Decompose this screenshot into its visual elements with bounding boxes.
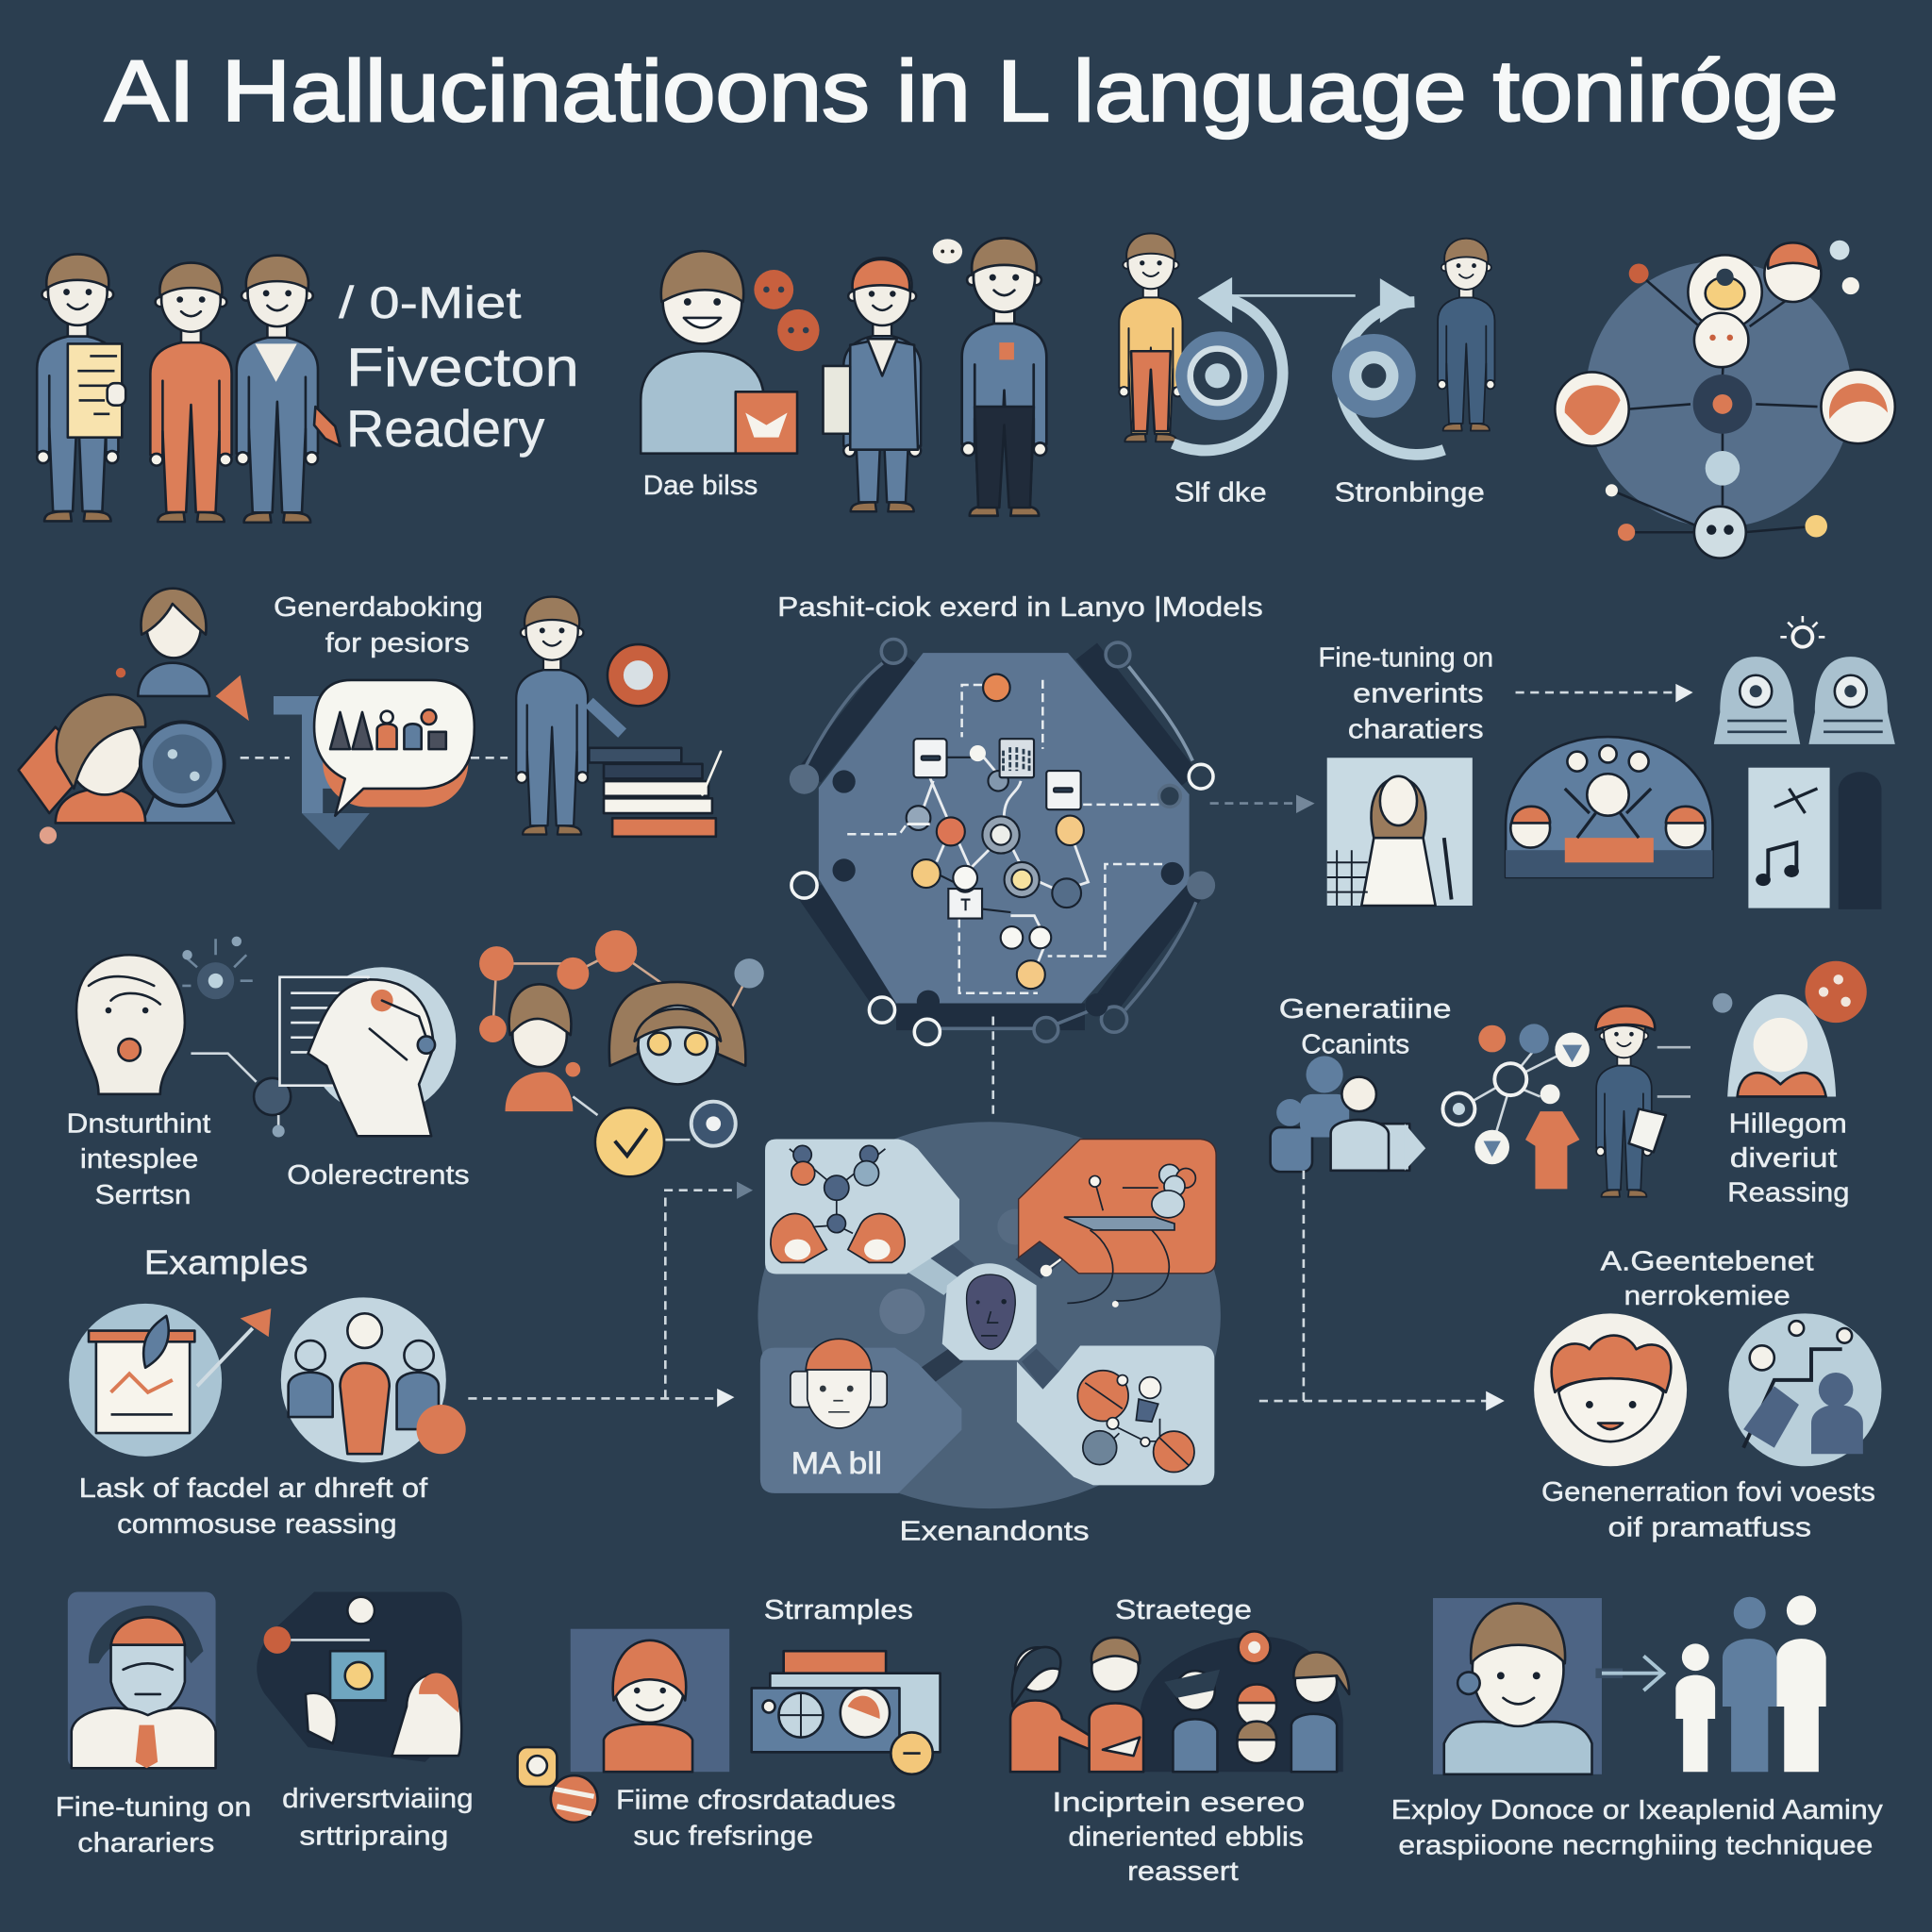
speech bubble bbox=[274, 680, 475, 850]
panel: hub with four cards bbox=[758, 1122, 1221, 1508]
panel: network circle bbox=[1555, 241, 1895, 558]
portrait card: man bbox=[1433, 1598, 1602, 1774]
graph links bbox=[920, 758, 1089, 963]
labels: diveriut bbox=[1730, 1143, 1837, 1174]
heading: charatiers bbox=[1348, 714, 1484, 744]
panel: fine-tuning on characters bbox=[1210, 616, 1895, 909]
panel: data bias bbox=[641, 238, 1046, 516]
heading bbox=[1279, 994, 1452, 1060]
labels: Stronbinge bbox=[1335, 478, 1485, 508]
card: molecules light bbox=[1017, 1346, 1214, 1485]
caption: suc frefsringe bbox=[633, 1821, 813, 1851]
connector node bbox=[191, 1054, 291, 1138]
panel: octagon model diagram bbox=[790, 639, 1215, 1044]
heading: Generdaboking bbox=[274, 592, 483, 623]
person with clipboard bbox=[1595, 1006, 1666, 1197]
panel: team readiness bbox=[37, 254, 579, 523]
smiling person bust bbox=[641, 251, 797, 454]
icon: check badge bbox=[573, 1096, 736, 1176]
avatar: right bbox=[1821, 370, 1895, 443]
panel: generation outcomes bbox=[1534, 1247, 1881, 1543]
chart glyph bbox=[1004, 747, 1029, 773]
people group right bbox=[1164, 1631, 1349, 1772]
panel: self-check strategies bbox=[1119, 233, 1494, 508]
arrow: from model to cards bbox=[1210, 794, 1315, 813]
heading: readiness: / 0-Miet bbox=[339, 277, 521, 327]
group of people bbox=[1271, 1056, 1425, 1172]
profile in circle with document bbox=[279, 967, 456, 1136]
avatar: upper right bbox=[1764, 242, 1821, 302]
heading: Ccanints bbox=[1301, 1030, 1409, 1060]
heading: Fine-tuning on bbox=[1319, 643, 1493, 674]
panel: diverse training bbox=[257, 1592, 474, 1851]
graph nodes bbox=[907, 675, 1084, 989]
hands with device bbox=[257, 1592, 462, 1762]
labels bbox=[67, 1108, 470, 1210]
node chain bbox=[1442, 1024, 1590, 1164]
person in orange bbox=[150, 263, 232, 522]
hub node bbox=[1693, 375, 1752, 434]
man centre bbox=[1090, 1638, 1143, 1772]
panel: generation for seniors bbox=[19, 589, 721, 850]
caption: dineriented ebblis bbox=[1068, 1823, 1304, 1853]
person in yellow shirt bbox=[1119, 233, 1183, 441]
heading: readiness: Fivecton bbox=[346, 338, 579, 398]
heading: Straetege bbox=[1115, 1595, 1252, 1625]
caption: oif pramatfuss bbox=[1607, 1513, 1811, 1543]
heading: nerrokemiee bbox=[1624, 1281, 1790, 1311]
card: MA bill face bbox=[760, 1339, 961, 1493]
dark arch bbox=[1140, 1637, 1343, 1772]
caption bbox=[56, 1792, 251, 1858]
caption: driversrtviaiing bbox=[282, 1784, 474, 1814]
avatar: top bbox=[1688, 255, 1762, 329]
caption bbox=[79, 1474, 428, 1540]
labels: Oolerectrents bbox=[287, 1160, 470, 1191]
heading: Strramples bbox=[764, 1595, 913, 1625]
caption: Lask of facdel ar dhreft of bbox=[79, 1474, 428, 1504]
caption: Genenerration fovi voests bbox=[1541, 1477, 1875, 1507]
heading: for pesiors bbox=[325, 628, 470, 658]
device panel bbox=[752, 1651, 941, 1774]
cycle arrows bbox=[1173, 277, 1444, 455]
labels: Serrtsn bbox=[95, 1180, 191, 1210]
heading bbox=[274, 592, 483, 658]
connector bars bbox=[908, 1240, 1064, 1390]
card: MA bill face: MA bll bbox=[791, 1445, 882, 1480]
card: music note bbox=[1748, 768, 1881, 909]
person in suit bbox=[1438, 239, 1494, 431]
stack of books bbox=[589, 748, 721, 837]
heading: Examples bbox=[144, 1243, 308, 1282]
labels: Slf dke bbox=[1174, 478, 1267, 508]
caption: Inciprtein esereo bbox=[1052, 1788, 1305, 1818]
person in lab coat bbox=[823, 258, 921, 511]
icon: three people in circle bbox=[281, 1297, 466, 1462]
heading: central model: Pashit-ciok exerd in Lanyo |Models bbox=[777, 592, 1263, 623]
portrait card: woman bbox=[571, 1629, 729, 1772]
heading: A.Geentebenet bbox=[1601, 1247, 1814, 1277]
portrait card bbox=[68, 1592, 216, 1768]
small badges bbox=[518, 1747, 597, 1823]
icon: head outline with baby bbox=[76, 937, 253, 1094]
arrow bbox=[1595, 1656, 1663, 1690]
caption: charariers bbox=[77, 1828, 214, 1858]
label: Dae bilss bbox=[643, 471, 758, 501]
heading bbox=[1319, 643, 1493, 744]
woman left bbox=[1010, 1647, 1096, 1772]
caption bbox=[1052, 1788, 1305, 1887]
panel: examples bbox=[69, 1243, 466, 1540]
solid edge nodes bbox=[790, 764, 1215, 1016]
panel: fine-tuning characters bbox=[56, 1592, 251, 1858]
card: woman portrait bbox=[1327, 758, 1473, 906]
panel: strategies bbox=[518, 1595, 941, 1851]
three figures bbox=[1675, 1595, 1826, 1772]
title: AI Hallucinatioons in L language toniróge bbox=[105, 43, 1839, 140]
avatar: centre bbox=[1694, 313, 1748, 367]
person in blue with tool bbox=[237, 256, 340, 523]
woman with linked nodes bbox=[479, 930, 764, 1111]
caption: commosuse reassing bbox=[117, 1509, 397, 1540]
heading: Generatiine bbox=[1279, 994, 1452, 1024]
dashed circuit links bbox=[847, 680, 1162, 993]
caption bbox=[616, 1785, 896, 1851]
person with gear machine bbox=[19, 589, 249, 844]
labels: Dnsturthint bbox=[67, 1108, 210, 1139]
arrow: hub to outcomes bbox=[1259, 1171, 1505, 1411]
arrow: examples to hub bbox=[468, 1182, 753, 1407]
ring nodes bbox=[791, 639, 1213, 1044]
person with speech icon bbox=[516, 597, 669, 835]
card: molecule pair bbox=[765, 1140, 959, 1274]
labels bbox=[1174, 478, 1485, 508]
caption: reassert bbox=[1127, 1857, 1239, 1887]
heading: enverints bbox=[1353, 678, 1484, 708]
central face bbox=[942, 1263, 1037, 1360]
caption: Fine-tuning on bbox=[56, 1792, 251, 1823]
arrow: to cameras bbox=[1516, 684, 1693, 702]
person in dark trousers bbox=[962, 238, 1046, 516]
caption bbox=[1391, 1795, 1883, 1861]
heading: readiness bbox=[339, 277, 579, 458]
avatar: left bbox=[1555, 372, 1629, 446]
icon: chat bubbles bbox=[754, 239, 962, 351]
caption: Exploy Donoce or Ixeaplenid Aaminy bbox=[1391, 1795, 1883, 1825]
card: audience bbox=[1506, 737, 1713, 877]
label: Exenandonts bbox=[899, 1517, 1090, 1547]
labels: Hillegom bbox=[1728, 1108, 1847, 1139]
caption: srttripraing bbox=[299, 1821, 448, 1851]
panel: strategy team bbox=[1010, 1595, 1349, 1887]
heading bbox=[1601, 1247, 1814, 1311]
panel: generative constraints bbox=[1271, 961, 1867, 1208]
panel: explore techniques bbox=[1391, 1595, 1883, 1861]
labels: intesplee bbox=[80, 1144, 198, 1174]
arch figure with bubble bbox=[1713, 961, 1867, 1096]
caption: eraspiioone necrnghiing techniquee bbox=[1398, 1831, 1873, 1861]
caption bbox=[282, 1784, 474, 1851]
labels: Reassing bbox=[1727, 1177, 1849, 1208]
bubble figures bbox=[330, 709, 446, 749]
card: orange device bbox=[1019, 1140, 1216, 1307]
labels bbox=[1727, 1108, 1849, 1208]
girl with glasses bbox=[609, 982, 745, 1084]
child in orange bbox=[1525, 1084, 1579, 1189]
icon: chart on a board bbox=[69, 1304, 271, 1457]
heading: readiness: Readery bbox=[346, 399, 545, 458]
avatar: orange haired face bbox=[1534, 1313, 1687, 1466]
icon: cameras and light bbox=[1714, 616, 1895, 744]
caption: Fiime cfrosrdatadues bbox=[616, 1785, 896, 1815]
avatar: climbing figure bbox=[1728, 1313, 1881, 1466]
gear icons bbox=[1175, 331, 1416, 420]
caption bbox=[1541, 1477, 1875, 1543]
panel: constraint and coherence bbox=[67, 930, 764, 1210]
person holding document bbox=[37, 254, 125, 521]
small nodes bbox=[1606, 241, 1859, 558]
